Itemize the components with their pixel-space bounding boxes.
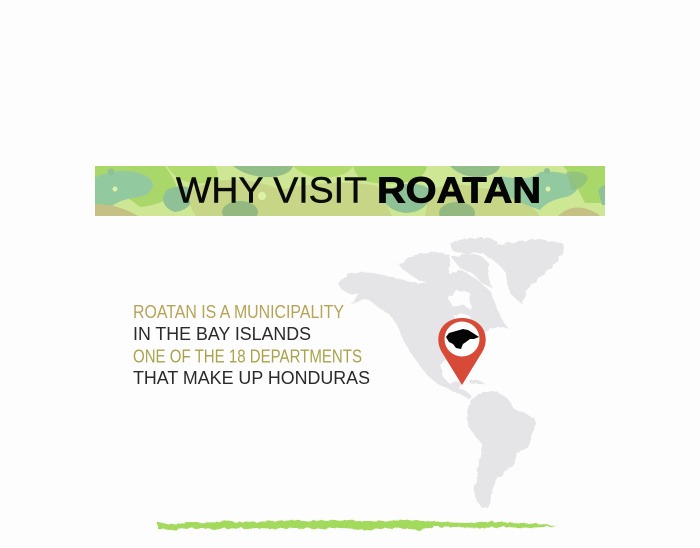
icon: Honduras silhouette (446, 329, 479, 349)
pin body (438, 318, 486, 385)
South America (467, 392, 536, 508)
North America mainland (338, 270, 508, 399)
line 2: IN THE BAY ISLANDS (133, 324, 311, 344)
map of the Americas (338, 238, 564, 508)
green brush stroke divider (157, 520, 557, 530)
description text (133, 302, 370, 388)
banner heading: ROATAN (377, 170, 541, 210)
Greenland (480, 239, 564, 304)
infographic canvas (95, 166, 605, 531)
location pin (438, 318, 486, 385)
line 3: ONE OF THE 18 DEPARTMENTS (133, 346, 362, 366)
Arctic archipelago (399, 252, 450, 284)
banner camouflage background (95, 166, 605, 216)
title banner (95, 166, 605, 216)
Great Lakes (454, 313, 472, 322)
Baffin Island (451, 254, 492, 288)
banner heading: WHY VISIT (176, 170, 367, 210)
Hudson Bay (447, 290, 471, 310)
line 4: THAT MAKE UP HONDURAS (133, 368, 370, 388)
line 1: ROATAN IS A MUNICIPALITY (133, 302, 344, 322)
Cuba and Caribbean (470, 380, 486, 384)
pin white centre (444, 322, 480, 356)
